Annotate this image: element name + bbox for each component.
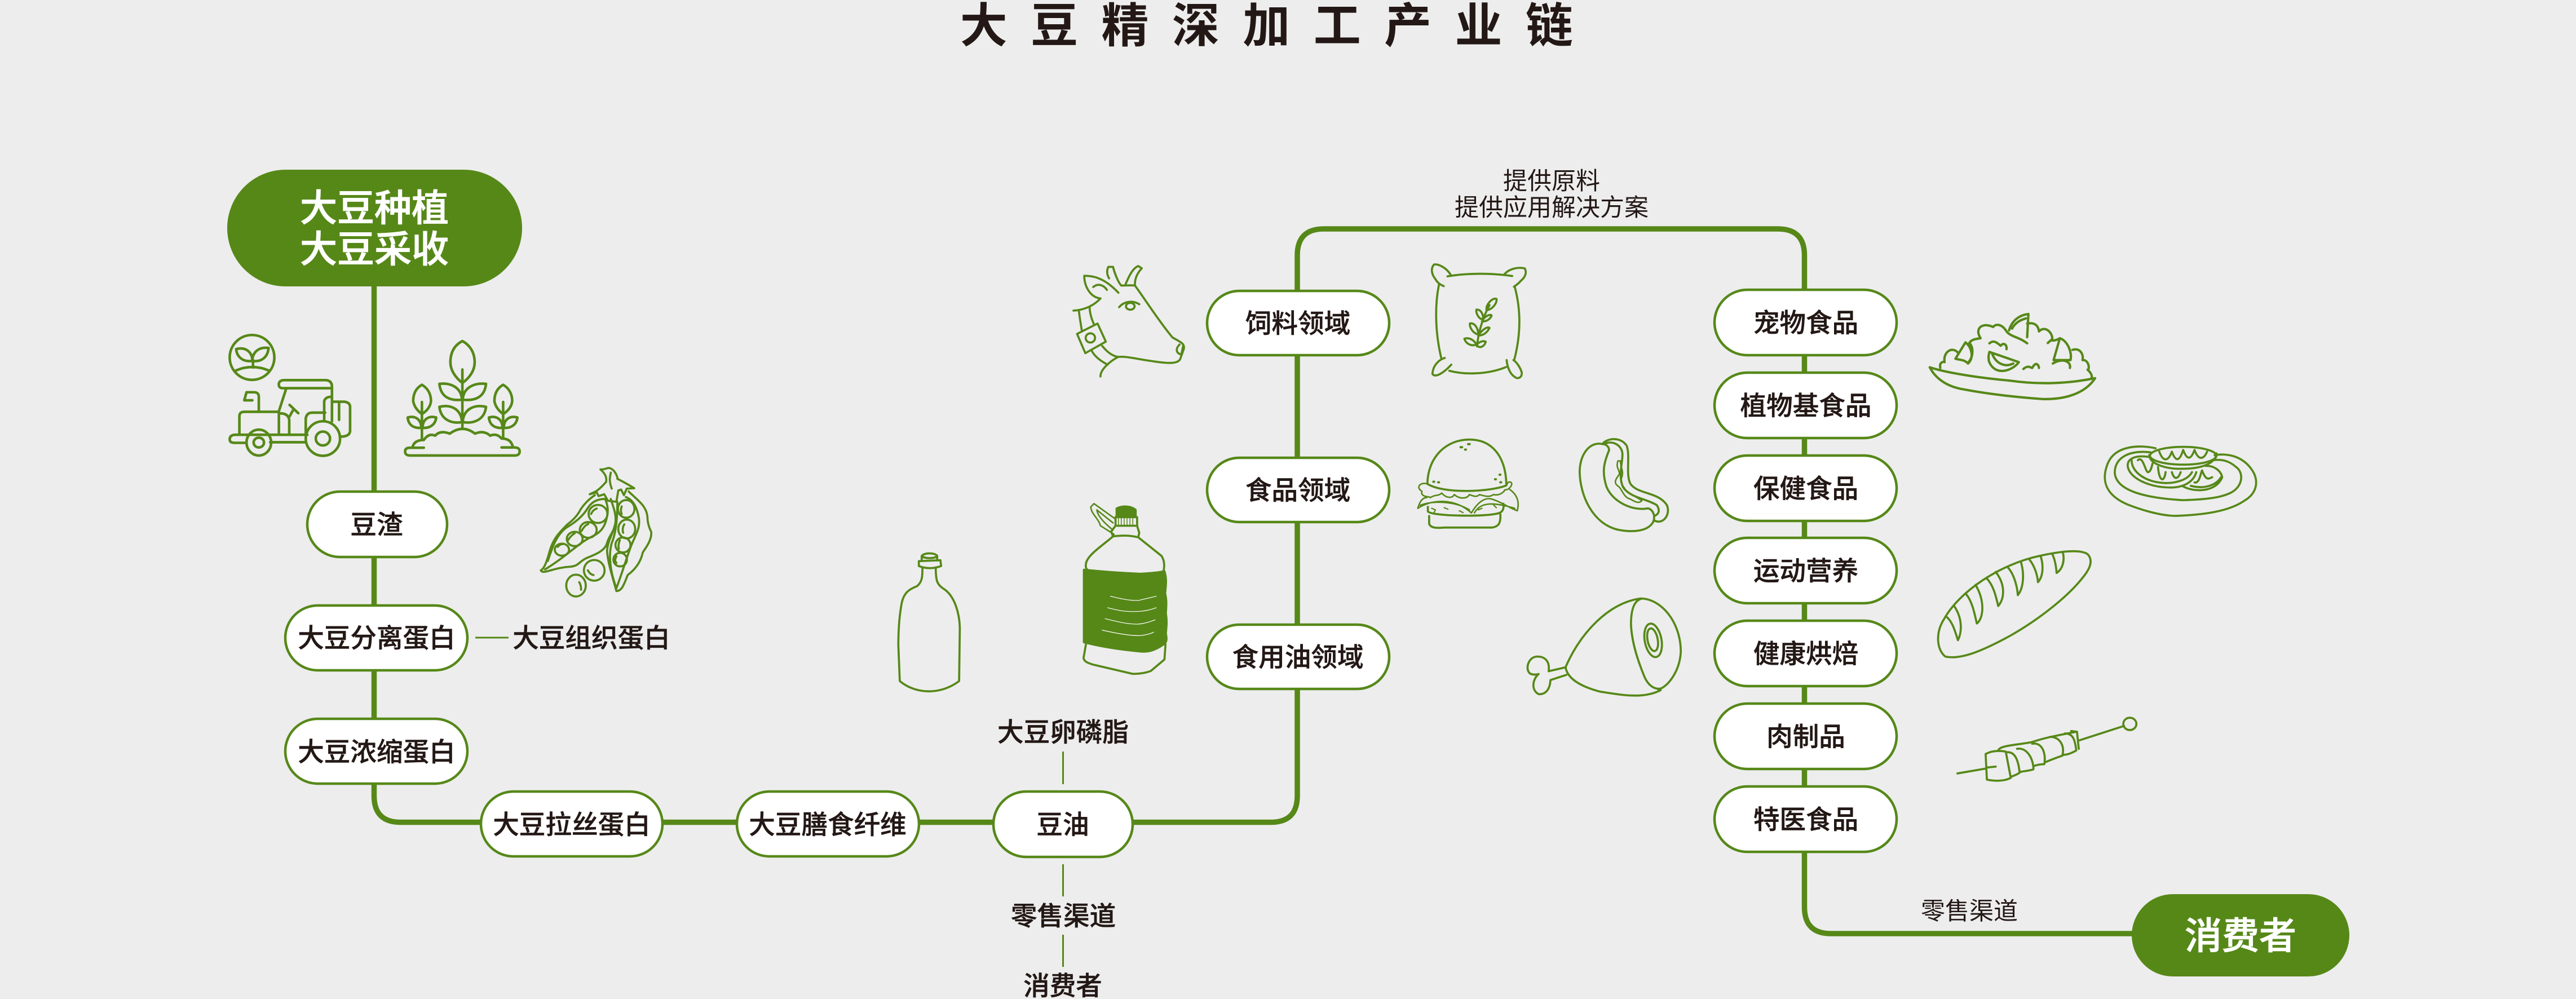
pill: 健康烘焙 [1715, 621, 1897, 686]
pill: 饲料领域: 饲料领域 [1245, 309, 1350, 338]
pill: 大豆膳食纤维: 大豆膳食纤维 [749, 810, 907, 839]
pill: 运动营养 [1715, 538, 1897, 603]
start pill: soybean planting and harvest [227, 170, 522, 286]
pill: 豆渣 [307, 492, 447, 557]
icon: tractor with sprout badge [229, 335, 350, 456]
icon: soybean pods [541, 468, 651, 596]
pill: 健康烘焙: 健康烘焙 [1753, 639, 1858, 669]
icon: oil bottle [898, 554, 960, 691]
pill: 运动营养: 运动营养 [1753, 556, 1858, 586]
icon: oil jug [1084, 503, 1167, 674]
end pill: consumers: 消费者 [2185, 915, 2296, 957]
pill: 保健食品: 保健食品 [1753, 474, 1858, 503]
pill: 食用油领域 [1207, 625, 1389, 689]
pill: 豆油 [993, 792, 1133, 857]
pill: 食品领域: 食品领域 [1245, 476, 1350, 505]
pill: 大豆膳食纤维 [737, 792, 919, 856]
pill: 食用油领域: 食用油领域 [1232, 643, 1363, 672]
icon: ham leg [1527, 599, 1681, 696]
pill: 肉制品 [1715, 704, 1897, 769]
pill: 保健食品 [1715, 456, 1897, 521]
start pill: soybean planting and harvest: 大豆种植 [300, 187, 449, 229]
label: 提供原料 提供应用解决方案: 提供原料 [1503, 168, 1600, 195]
icon: feed sack [1432, 264, 1526, 378]
pill: 肉制品: 肉制品 [1766, 722, 1845, 752]
pill: 饲料领域 [1207, 291, 1389, 355]
pill: 植物基食品: 植物基食品 [1740, 391, 1871, 421]
pill: 大豆分离蛋白 [285, 605, 467, 670]
icon: baguette [1938, 551, 2091, 657]
pill: 豆渣: 豆渣 [350, 510, 403, 540]
pill: 大豆拉丝蛋白 [481, 792, 662, 856]
pill: 植物基食品 [1715, 373, 1897, 438]
pill: 大豆浓缩蛋白: 大豆浓缩蛋白 [298, 737, 456, 767]
title: 大豆精深加工产业链 [960, 0, 1596, 52]
start pill: soybean planting and harvest: 大豆采收 [300, 228, 449, 270]
end pill: consumers [2132, 894, 2349, 976]
icon: salad plate [1930, 314, 2095, 399]
icon: skewer [1958, 718, 2136, 781]
icon: cow head [1073, 266, 1184, 377]
pill: 宠物食品 [1715, 290, 1897, 355]
label: 零售渠道 on final line: 零售渠道 [1921, 898, 2018, 925]
pill: 特医食品: 特医食品 [1753, 805, 1858, 834]
icon: hot dog [1580, 439, 1668, 531]
label: 提供原料 提供应用解决方案: 提供应用解决方案 [1455, 195, 1649, 222]
pill: 豆油: 豆油 [1036, 810, 1089, 839]
label: 零售渠道 (retail): 零售渠道 [1011, 901, 1116, 931]
pill: 大豆拉丝蛋白: 大豆拉丝蛋白 [493, 810, 651, 839]
pill: 大豆分离蛋白: 大豆分离蛋白 [298, 624, 456, 653]
label: 大豆卵磷脂: 大豆卵磷脂 [997, 718, 1129, 747]
icon: sausage platter [2105, 447, 2256, 516]
connector: main flow line [374, 229, 2142, 967]
pill: 食品领域 [1207, 458, 1389, 522]
pill: 宠物食品: 宠物食品 [1753, 308, 1858, 338]
icon: burger [1418, 440, 1518, 528]
icon: seedlings [405, 341, 520, 456]
label: 提供原料 提供应用解决方案 [1455, 168, 1649, 222]
pill: 大豆浓缩蛋白 [285, 719, 467, 784]
pill: 特医食品 [1715, 786, 1897, 852]
label: 大豆组织蛋白: 大豆组织蛋白 [512, 624, 670, 653]
